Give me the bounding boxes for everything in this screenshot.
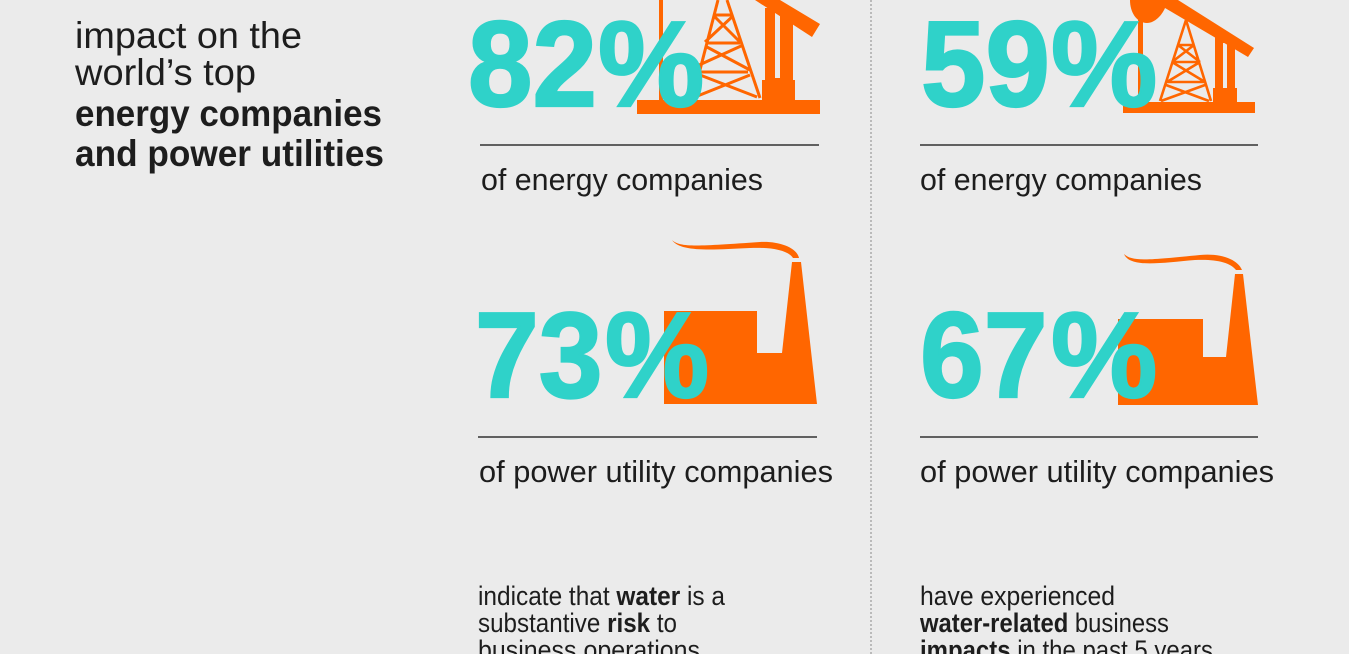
panel: 82% of energy companies bbox=[468, 0, 820, 197]
stat: 73%: % bbox=[605, 288, 709, 424]
text block: water-related impacts: water-related business bbox=[919, 608, 1169, 638]
panel: 59% of energy companies bbox=[920, 0, 1258, 197]
label: of power utility companies: of power utility companies bbox=[920, 454, 1274, 489]
text block: water risk: substantive risk to bbox=[478, 608, 677, 638]
stat: 67%: 67 bbox=[920, 288, 1048, 424]
stat: 59%: 59 bbox=[921, 0, 1050, 133]
stat: 82%: 82 bbox=[468, 0, 597, 133]
text block: water-related impacts bbox=[919, 581, 1213, 654]
stat: 67% bbox=[920, 287, 1157, 424]
stat: 59% bbox=[921, 0, 1157, 133]
heading: impact on the bbox=[75, 15, 302, 56]
heading: world’s top bbox=[74, 52, 256, 93]
icon: oil pump 82% bbox=[637, 0, 820, 114]
icon: oil pump 59% bbox=[1123, 0, 1255, 113]
icon: factory 67% bbox=[1118, 254, 1258, 405]
label: of energy companies: of energy companies bbox=[920, 162, 1202, 197]
label: of energy companies: of energy companies bbox=[481, 162, 763, 197]
panel: 67% of power utility companies bbox=[920, 254, 1274, 489]
text block: water risk: indicate that water is a bbox=[478, 581, 726, 611]
heading: and power utilities bbox=[75, 133, 384, 174]
stat: 67%: % bbox=[1051, 287, 1157, 423]
heading: energy companies bbox=[75, 93, 382, 134]
stat: 82% bbox=[468, 0, 704, 133]
text block: water risk bbox=[478, 581, 726, 654]
stat: 73% bbox=[475, 288, 709, 424]
icon: factory 73% bbox=[664, 240, 817, 404]
panel: 73% of power utility companies bbox=[475, 240, 833, 489]
heading bbox=[74, 15, 384, 174]
text block: water-related impacts: have experienced bbox=[920, 581, 1115, 611]
label: of power utility companies: of power utility companies bbox=[479, 454, 833, 489]
stat: 73%: 73 bbox=[475, 288, 603, 424]
